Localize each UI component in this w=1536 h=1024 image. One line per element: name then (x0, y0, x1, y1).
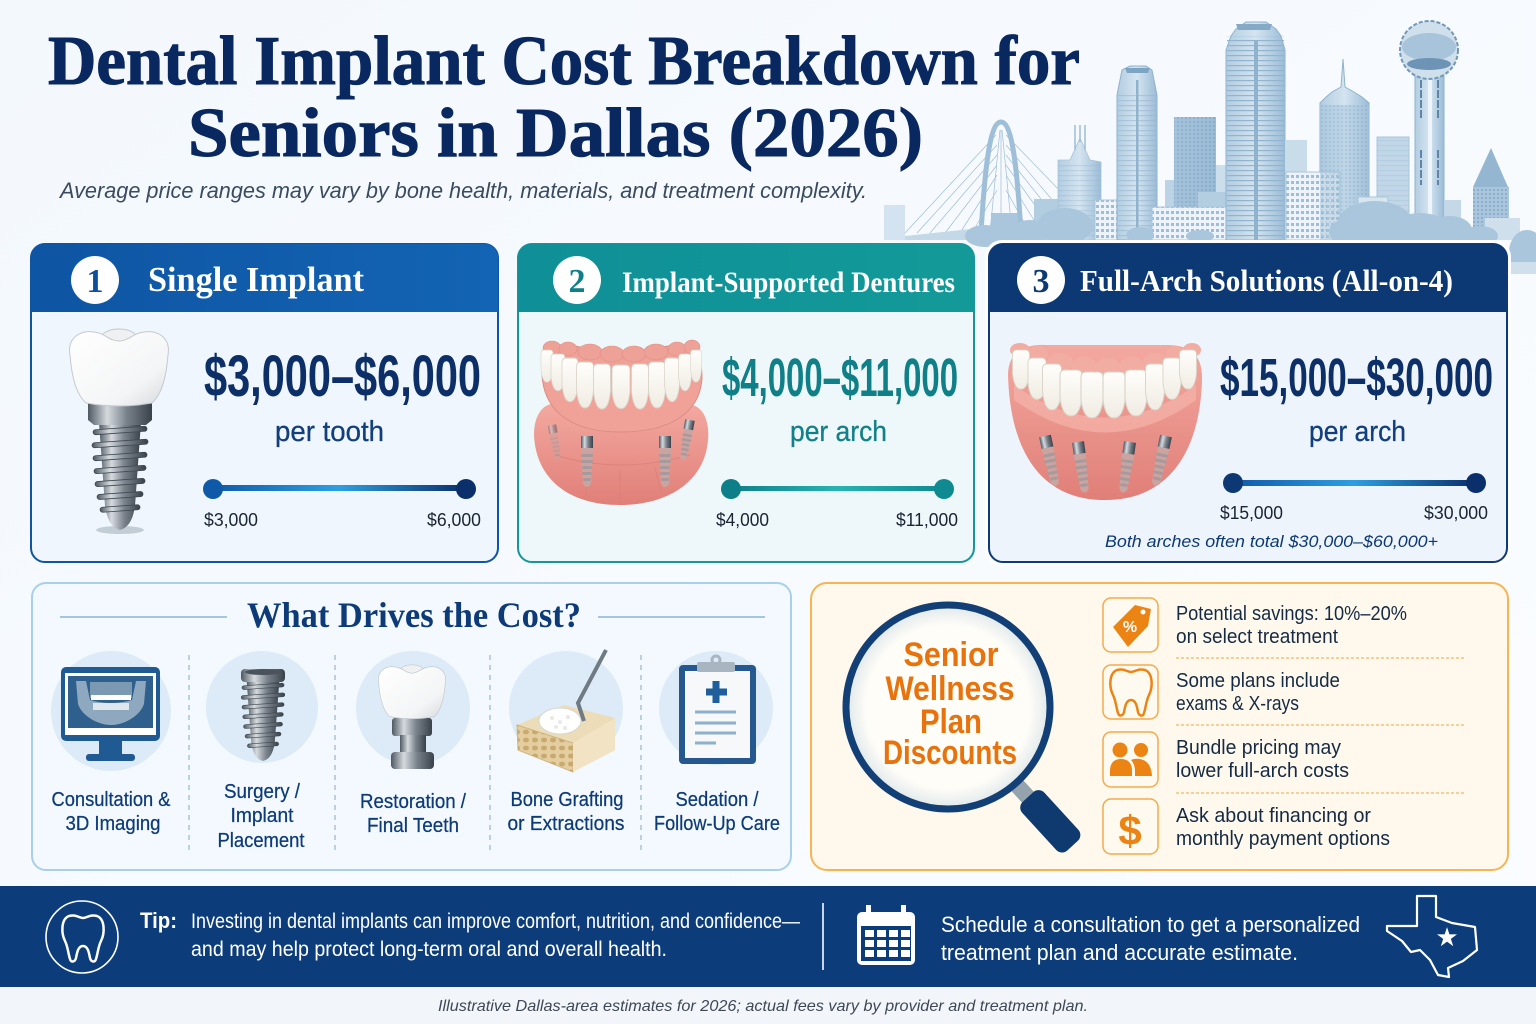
item: consultation: Consultation & (52, 789, 171, 811)
range slider: $4,000 (716, 510, 769, 530)
title (48, 23, 1080, 172)
tip text (140, 908, 800, 961)
icon: denture on implants (534, 340, 708, 505)
price: $3,000–$6,000 (204, 344, 481, 409)
benefit: financing (1103, 799, 1390, 854)
number badge: 3 (1032, 263, 1050, 300)
item: restoration: Final Teeth (367, 815, 459, 837)
panel: single implant (31, 244, 498, 562)
title: Seniors in Dallas (2026) (188, 95, 923, 172)
magnifier label: Plan (920, 703, 982, 741)
icon: texas (1387, 896, 1477, 977)
icon: texas: ★ (1435, 922, 1459, 952)
range slider (203, 479, 481, 530)
Dallas skyline illustration (884, 21, 1536, 274)
price: $4,000–$11,000 (722, 348, 958, 408)
item: bone grafting (508, 650, 624, 835)
benefit: financing: $ (1118, 807, 1142, 854)
item: restoration: Restoration / (360, 791, 466, 813)
call to action (941, 912, 1360, 965)
unit: per arch (790, 416, 887, 448)
panel: full-arch solutions (985, 240, 1511, 566)
footer note (0, 987, 1536, 1024)
item: bone grafting: or Extractions (508, 813, 624, 835)
card heading: Single Implant (148, 260, 364, 299)
panel: implant-supported dentures (518, 244, 974, 562)
number badge (553, 256, 601, 304)
footer note: Illustrative Dallas-area estimates for 2026; actual fees vary by provider and treatment plan. (438, 998, 1088, 1015)
benefit: exams: Some plans include (1176, 670, 1340, 692)
item: surgery: Surgery / (224, 781, 300, 803)
tip text: Investing in dental implants can improve comfort, nutrition, and confidence— (191, 910, 800, 933)
item: consultation: 3D Imaging (66, 813, 160, 835)
benefit: exams: exams & X-rays (1176, 693, 1299, 715)
number badge: 1 (86, 263, 104, 300)
magnifying glass (846, 605, 1084, 856)
range slider: $6,000 (427, 510, 481, 530)
title: Dental Implant Cost Breakdown for (48, 23, 1080, 100)
benefit: financing: Ask about financing or (1176, 805, 1371, 827)
item: restoration (356, 651, 470, 837)
unit: per tooth (275, 416, 384, 448)
icon: full-arch prosthesis (1008, 343, 1202, 500)
bottom banner (0, 886, 1536, 987)
call to action: Schedule a consultation to get a personalized (941, 912, 1360, 937)
card header (31, 244, 498, 312)
item: surgery (206, 651, 318, 852)
benefit: bundle (1103, 732, 1349, 787)
card heading: Full-Arch Solutions (All-on-4) (1080, 263, 1453, 298)
item: sedation: Follow-Up Care (654, 813, 780, 835)
range slider: $11,000 (896, 510, 958, 530)
item: bone grafting: Bone Grafting (510, 789, 624, 811)
subtitle: Average price ranges may vary by bone health, materials, and treatment complexity. (58, 178, 867, 203)
range slider (716, 479, 958, 530)
call to action: treatment plan and accurate estimate. (941, 940, 1298, 965)
item: consultation (51, 651, 171, 835)
heading: What Drives the Cost? (247, 595, 581, 635)
icon: calendar (857, 905, 915, 965)
range slider (1220, 473, 1488, 523)
icon: tooth (46, 901, 118, 973)
note: Both arches often total $30,000–$60,000+ (1105, 532, 1438, 551)
tip text: and may help protect long-term oral and overall health. (191, 938, 667, 961)
number badge (1017, 256, 1065, 304)
icon: dental implant (70, 329, 168, 534)
magnifier label: Wellness (886, 670, 1014, 708)
unit: per arch (1309, 416, 1406, 448)
item: sedation: Sedation / (676, 789, 759, 811)
tip text: Tip: (140, 908, 177, 933)
benefit: bundle: Bundle pricing may (1176, 737, 1341, 759)
panel: senior wellness plan discounts (811, 583, 1508, 870)
range slider: $3,000 (204, 510, 258, 530)
number badge (71, 256, 119, 304)
item: sedation (654, 651, 780, 835)
card header (989, 244, 1507, 312)
benefit: savings (1103, 598, 1407, 652)
magnifier label: Discounts (883, 734, 1017, 772)
benefit: savings: on select treatment (1176, 626, 1338, 648)
item: surgery: Implant (230, 805, 294, 827)
number badge: 2 (568, 263, 586, 300)
benefit: savings: Potential savings: 10%–20% (1176, 603, 1407, 625)
item: surgery: Placement (218, 830, 305, 852)
panel: what drives the cost (32, 583, 791, 870)
card header (518, 244, 974, 312)
magnifier label: Senior (904, 636, 998, 674)
benefit: bundle: lower full-arch costs (1176, 760, 1349, 782)
benefit: savings: % (1123, 619, 1137, 636)
range slider: $30,000 (1424, 503, 1488, 523)
card heading: Implant-Supported Dentures (622, 266, 955, 299)
benefit: financing: monthly payment options (1176, 828, 1390, 850)
benefit: exams (1103, 665, 1340, 719)
range slider: $15,000 (1220, 503, 1283, 523)
